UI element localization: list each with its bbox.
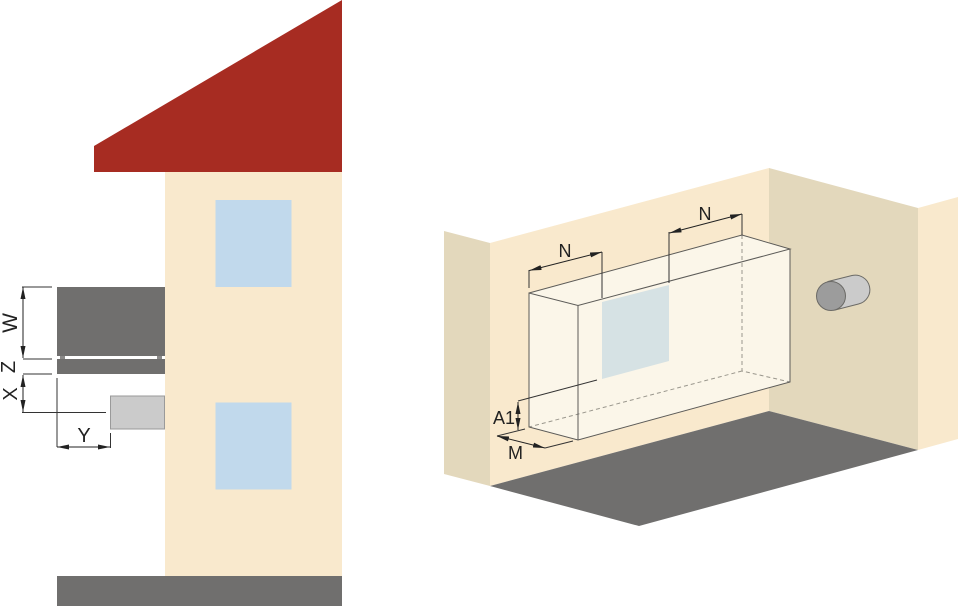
- dimension Y: Y: [77, 425, 91, 447]
- indoor unit: [57, 287, 165, 374]
- roof: [94, 0, 342, 172]
- clearance box: [529, 235, 790, 440]
- right wall: [769, 168, 918, 450]
- far right wall strip: [918, 197, 958, 450]
- ground: [57, 576, 342, 606]
- dimension N left: N: [558, 241, 572, 261]
- dimension A1: [493, 380, 597, 430]
- house wall: [165, 172, 342, 576]
- dimension N right: N: [698, 204, 712, 224]
- outdoor unit: [110, 396, 164, 429]
- lower window: [216, 402, 292, 490]
- house side view: [0, 0, 342, 606]
- dimension X: [0, 375, 106, 447]
- floor: [490, 411, 918, 526]
- dimension X: X: [0, 387, 22, 401]
- dimension Y: [57, 425, 110, 448]
- dimension N left: [529, 241, 602, 298]
- dimension A1: A1: [493, 408, 515, 428]
- left side wall: [444, 231, 490, 486]
- dimension M: [497, 429, 573, 463]
- room perspective view: [444, 168, 958, 526]
- wall window seen through box: [602, 285, 669, 379]
- upper window: [216, 200, 292, 287]
- dimension W: [0, 287, 52, 374]
- dimension N right: [669, 204, 742, 283]
- dimension M: M: [508, 443, 523, 463]
- back wall: [490, 168, 769, 486]
- pipe outlet: [816, 275, 870, 310]
